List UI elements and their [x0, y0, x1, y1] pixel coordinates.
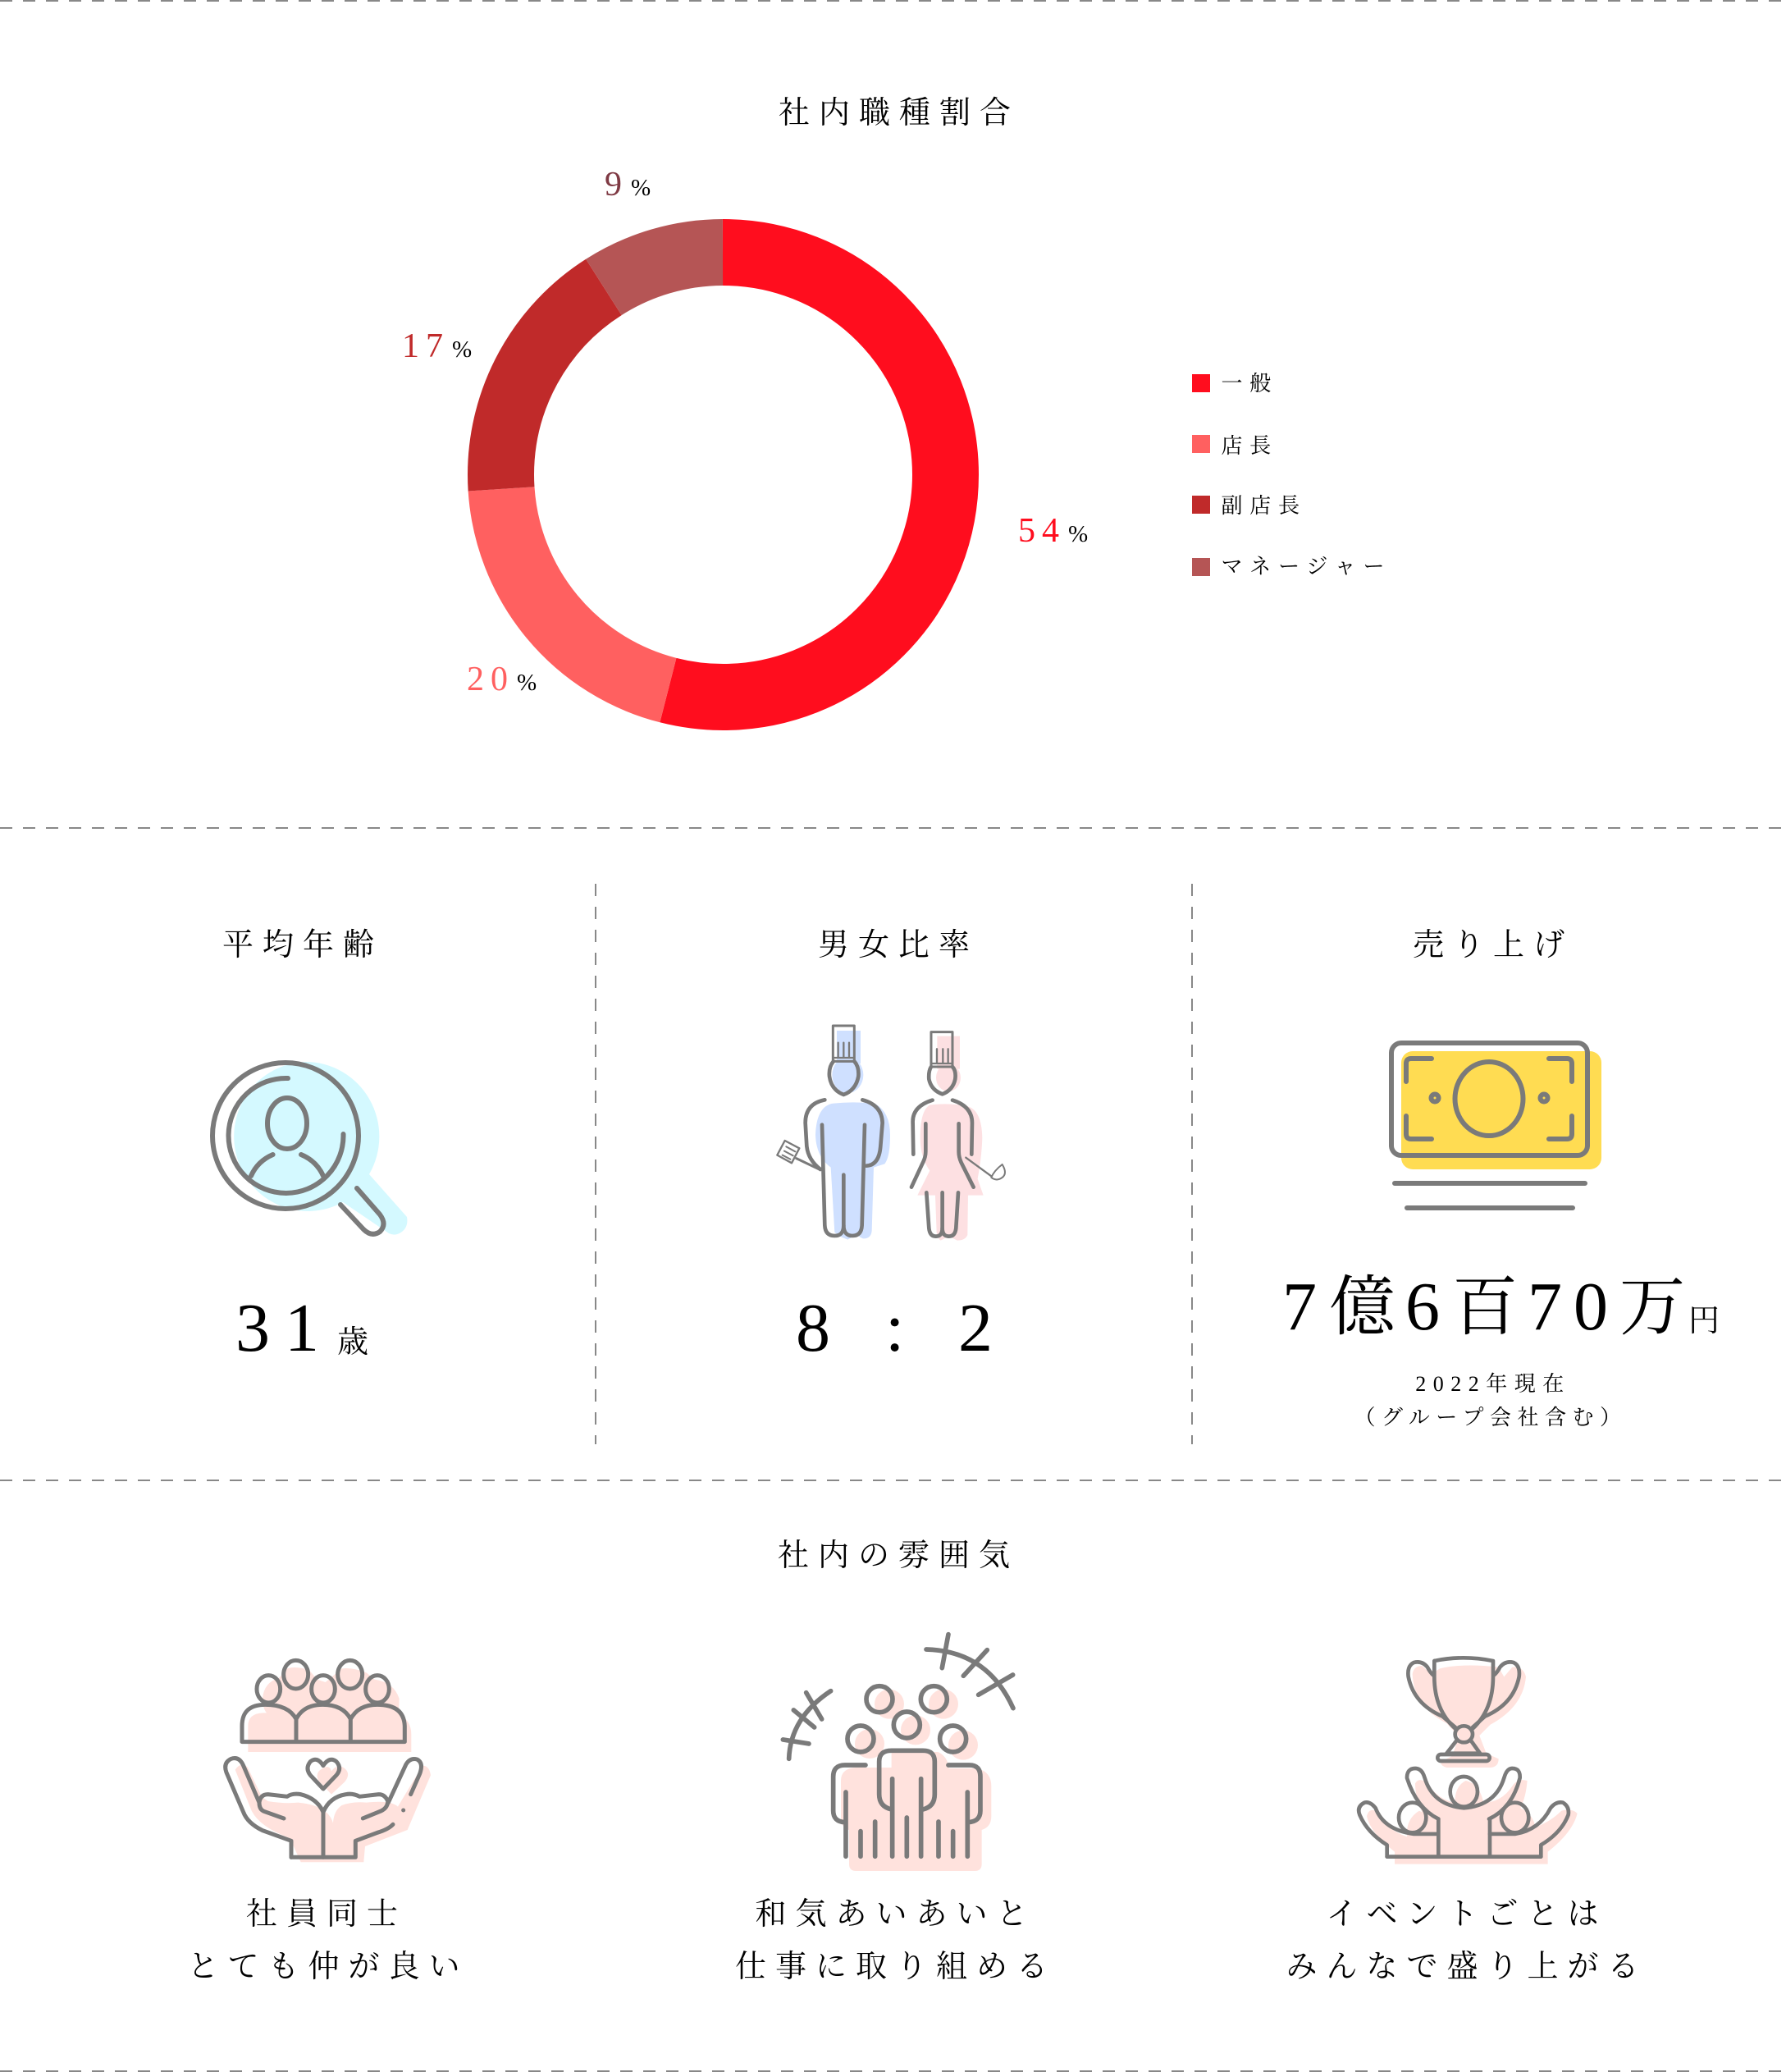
caption: colleagues get along: 社員同士 [246, 1897, 407, 1932]
legend: 店長 [1221, 434, 1278, 458]
icon: banknote [1391, 1043, 1601, 1208]
panel: workplace atmosphere [187, 1539, 1648, 1984]
label: 17%: 17% [402, 327, 472, 365]
value: 31 years: 31 [235, 1290, 319, 1366]
caption: working in harmony: 仕事に取り組める [735, 1950, 1057, 1984]
panel: gender ratio [777, 928, 1005, 1366]
legend: 副店長 [1221, 494, 1307, 518]
legend [1192, 372, 1391, 579]
value: revenue amount: 百 [1452, 1272, 1518, 1344]
heading: atmosphere: 社内の雰囲気 [778, 1539, 1019, 1573]
caption: events are exciting: みんなで盛り上がる [1286, 1950, 1648, 1984]
value: revenue amount: 7 [1282, 1269, 1317, 1345]
icon: cheering group [783, 1635, 1013, 1871]
note: as of 2022: 2022年現在 [1415, 1372, 1571, 1396]
legend: 一般 [1221, 372, 1278, 396]
icon: magnifier with person [212, 1062, 407, 1235]
icon: male chef [777, 1026, 890, 1240]
value: revenue amount: 6 [1405, 1269, 1440, 1345]
panel: job type share [402, 96, 1391, 698]
caption: colleagues get along [187, 1897, 469, 1984]
value: revenue amount: 億 [1329, 1272, 1397, 1344]
icon: female chef [911, 1032, 1005, 1241]
caption: working in harmony [735, 1897, 1057, 1984]
label: 20%: 20% [467, 661, 537, 698]
note: including group companies: （グループ会社含む） [1354, 1406, 1627, 1429]
value: 8:2 ratio: 8:2 [796, 1290, 993, 1366]
value: revenue amount: 万 [1619, 1272, 1685, 1344]
unit: years old: 歳 [337, 1325, 368, 1360]
value: revenue amount: 70 [1528, 1269, 1608, 1345]
caption: working in harmony: 和気あいあいと [755, 1897, 1037, 1932]
unit: yen: 円 [1688, 1304, 1720, 1338]
icon: trophy and celebrating team [1359, 1658, 1578, 1864]
heading: job type share: 社内職種割合 [779, 96, 1020, 130]
panel: revenue [1282, 928, 1720, 1429]
heading: average age: 平均年齢 [222, 928, 383, 963]
caption: events are exciting: イベントごとは [1326, 1897, 1608, 1932]
panel: average age [212, 928, 407, 1366]
caption: events are exciting [1286, 1897, 1648, 1984]
donut chart [500, 253, 945, 698]
icon: team and caring hands [226, 1660, 431, 1862]
heading: revenue: 売り上げ [1413, 928, 1574, 963]
caption: colleagues get along: とても仲が良い [187, 1950, 469, 1984]
label: 9%: 9% [605, 166, 651, 204]
legend: マネージャー [1221, 555, 1391, 579]
label: 54%: 54% [1018, 512, 1088, 550]
heading: gender ratio: 男女比率 [818, 928, 979, 963]
